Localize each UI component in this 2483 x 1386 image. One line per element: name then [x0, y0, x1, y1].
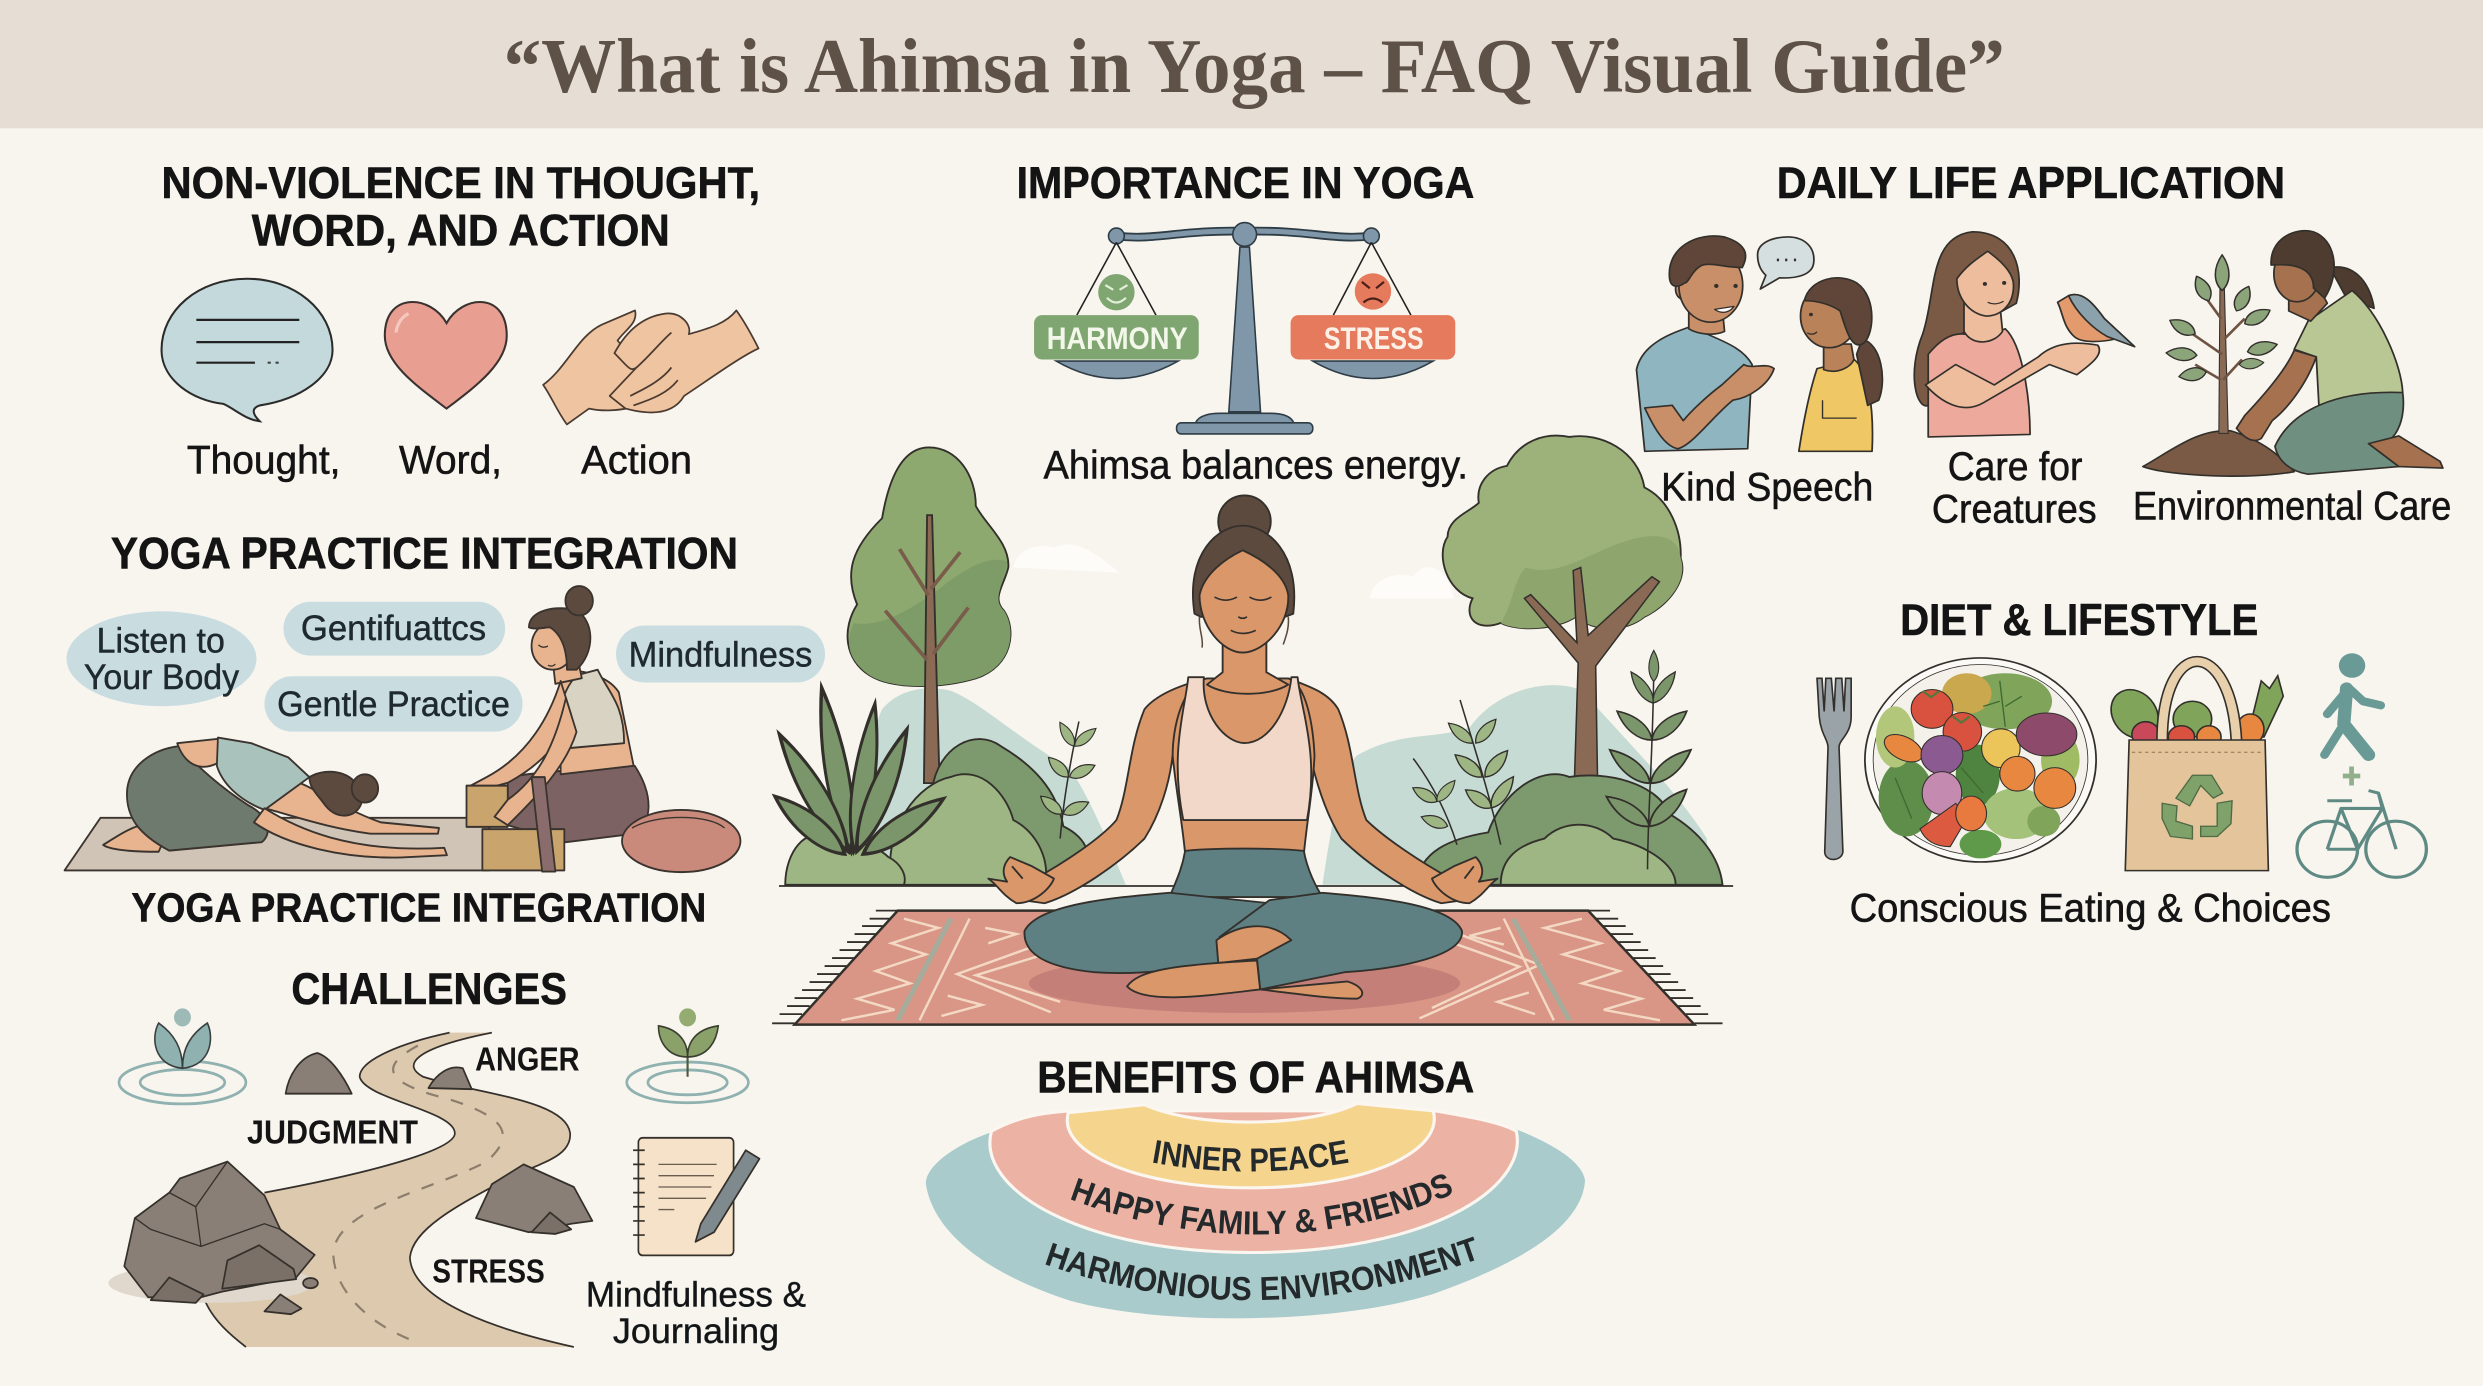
- heading: non-violence: [162, 159, 760, 255]
- heading: daily life application: DAILY LIFE APPLICATION: [1777, 159, 2285, 208]
- figure: head and hair: [1193, 495, 1294, 653]
- labels: thought, word, action: Action: [581, 439, 692, 483]
- icon: salad plate: [1865, 658, 2096, 862]
- figure: crossed feet: [1127, 926, 1362, 999]
- left bushes and plants: [768, 686, 1099, 885]
- heading: benefits of ahimsa: BENEFITS OF AHIMSA: [1037, 1054, 1474, 1103]
- icon: fork: [1817, 678, 1851, 859]
- concentric benefit arcs: [926, 1103, 1585, 1318]
- background hills and clouds: [851, 544, 1707, 885]
- illustration: environmental care: [2143, 231, 2443, 476]
- pill: listen to your body: [67, 611, 257, 706]
- label: environmental care: Environmental Care: [2133, 484, 2451, 528]
- panel: benefits of ahimsa: [926, 1054, 1585, 1318]
- heading: non-violence: NON-VIOLENCE IN THOUGHT,: [162, 159, 760, 208]
- title banner: [0, 0, 2483, 128]
- panel: daily life application: [1636, 159, 2451, 532]
- label: care for creatures: Care for: [1948, 445, 2082, 489]
- heading: yoga practice integration: YOGA PRACTICE INTEGRATION: [111, 530, 738, 579]
- caption: yoga practice integration: YOGA PRACTICE INTEGRATION: [131, 885, 706, 931]
- icon: bicycle: [2297, 791, 2426, 877]
- pill: listen to your body: Listen to: [97, 620, 225, 660]
- icon: clasped hands: [543, 310, 759, 424]
- label: mindfulness and journaling: Journaling: [613, 1311, 779, 1351]
- panel: non-violence in thought, word, and action: [162, 159, 760, 483]
- caption: ahimsa balances energy: Ahimsa balances energy.: [1044, 443, 1468, 487]
- panel: diet and lifestyle: [1817, 596, 2426, 931]
- labels: thought, word, action: [187, 439, 692, 483]
- icon: walking person: [2325, 653, 2381, 755]
- figure: arms and torso: [1023, 641, 1463, 903]
- pill: gentle practice: [264, 676, 523, 732]
- label: inner peace: INNER PEACE: [1153, 1140, 1348, 1172]
- right bushes and plants: [1410, 650, 1723, 885]
- labels: anger, judgment, stress: JUDGMENT: [247, 1114, 418, 1151]
- labels: thought, word, action: Thought,: [187, 439, 340, 483]
- label: conscious eating and choices: Conscious Eating & Choices: [1850, 887, 2331, 931]
- panel: challenges: [108, 965, 806, 1351]
- patterned rug with fringe: [772, 911, 1723, 1025]
- figure: mudra hands: [988, 857, 1498, 903]
- illustration: two yoga practitioners on mat: [65, 586, 740, 872]
- icon: heart: [385, 302, 507, 409]
- labels: anger, judgment, stress: STRESS: [432, 1254, 545, 1291]
- illustration: kind speech: [1636, 236, 1882, 451]
- title banner: “What is Ahimsa in Yoga – FAQ Visual Guide”: [504, 23, 2005, 109]
- illustration: care for creatures: [1914, 232, 2135, 437]
- labels: anger, judgment, stress: [247, 1042, 580, 1291]
- label: care for creatures: [1932, 445, 2097, 532]
- right tree: [1443, 436, 1682, 780]
- icon: lotus with water ripples: [119, 1008, 246, 1104]
- label: kind speech: Kind Speech: [1661, 465, 1873, 509]
- tag: stress: STRESS: [1324, 320, 1424, 356]
- pill: mindfulness: [616, 626, 825, 683]
- pill: gentifuattcs: [283, 602, 505, 656]
- left tree: [848, 447, 1011, 783]
- illustration: winding path with rocks: [108, 1033, 592, 1347]
- icon: plus sign: [2343, 766, 2360, 785]
- icon: speech bubble: [162, 279, 333, 421]
- pill: gentifuattcs: Gentifuattcs: [301, 608, 486, 648]
- panel: yoga practice integration: [65, 530, 825, 931]
- icon: sprout with water ripples: [627, 1008, 748, 1103]
- heading: non-violence: WORD, AND ACTION: [252, 206, 670, 255]
- panel: importance in yoga: [1017, 159, 1474, 487]
- illustration: balance scale: [1034, 223, 1455, 434]
- pill: listen to your body: Your Body: [84, 657, 239, 697]
- heading: importance in yoga: IMPORTANCE IN YOGA: [1017, 159, 1474, 208]
- ground line: [779, 884, 1733, 887]
- icon: red angry face: [1355, 273, 1391, 310]
- figure: sports top: [1178, 677, 1311, 820]
- pill: mindfulness: Mindfulness: [629, 635, 812, 675]
- label: care for creatures: Creatures: [1932, 488, 2097, 532]
- pill: gentle practice: Gentle Practice: [277, 684, 510, 724]
- labels: thought, word, action: Word,: [399, 439, 502, 483]
- tag: harmony: HARMONY: [1047, 320, 1188, 356]
- panel: central meditation scene: [768, 436, 1733, 1025]
- label: harmonious environment: HARMONIOUS ENVIRONMENT: [1046, 1236, 1474, 1300]
- label: mindfulness and journaling: [586, 1274, 806, 1351]
- icon: green face: [1098, 274, 1135, 310]
- label: happy family and friends: HAPPY FAMILY & FRIENDS: [1071, 1174, 1452, 1234]
- heading: challenges: CHALLENGES: [291, 965, 567, 1014]
- meditating woman: [988, 495, 1498, 999]
- label: mindfulness and journaling: Mindfulness &: [586, 1274, 806, 1314]
- icon: recycled tote bag with vegetables: [2102, 661, 2283, 871]
- figure: leggings: [1024, 849, 1462, 989]
- icon: journal and pen: [633, 1138, 760, 1255]
- tag: stress: [1291, 315, 1455, 360]
- heading: diet and lifestyle: DIET & LIFESTYLE: [1900, 596, 2258, 645]
- labels: anger, judgment, stress: ANGER: [475, 1042, 580, 1079]
